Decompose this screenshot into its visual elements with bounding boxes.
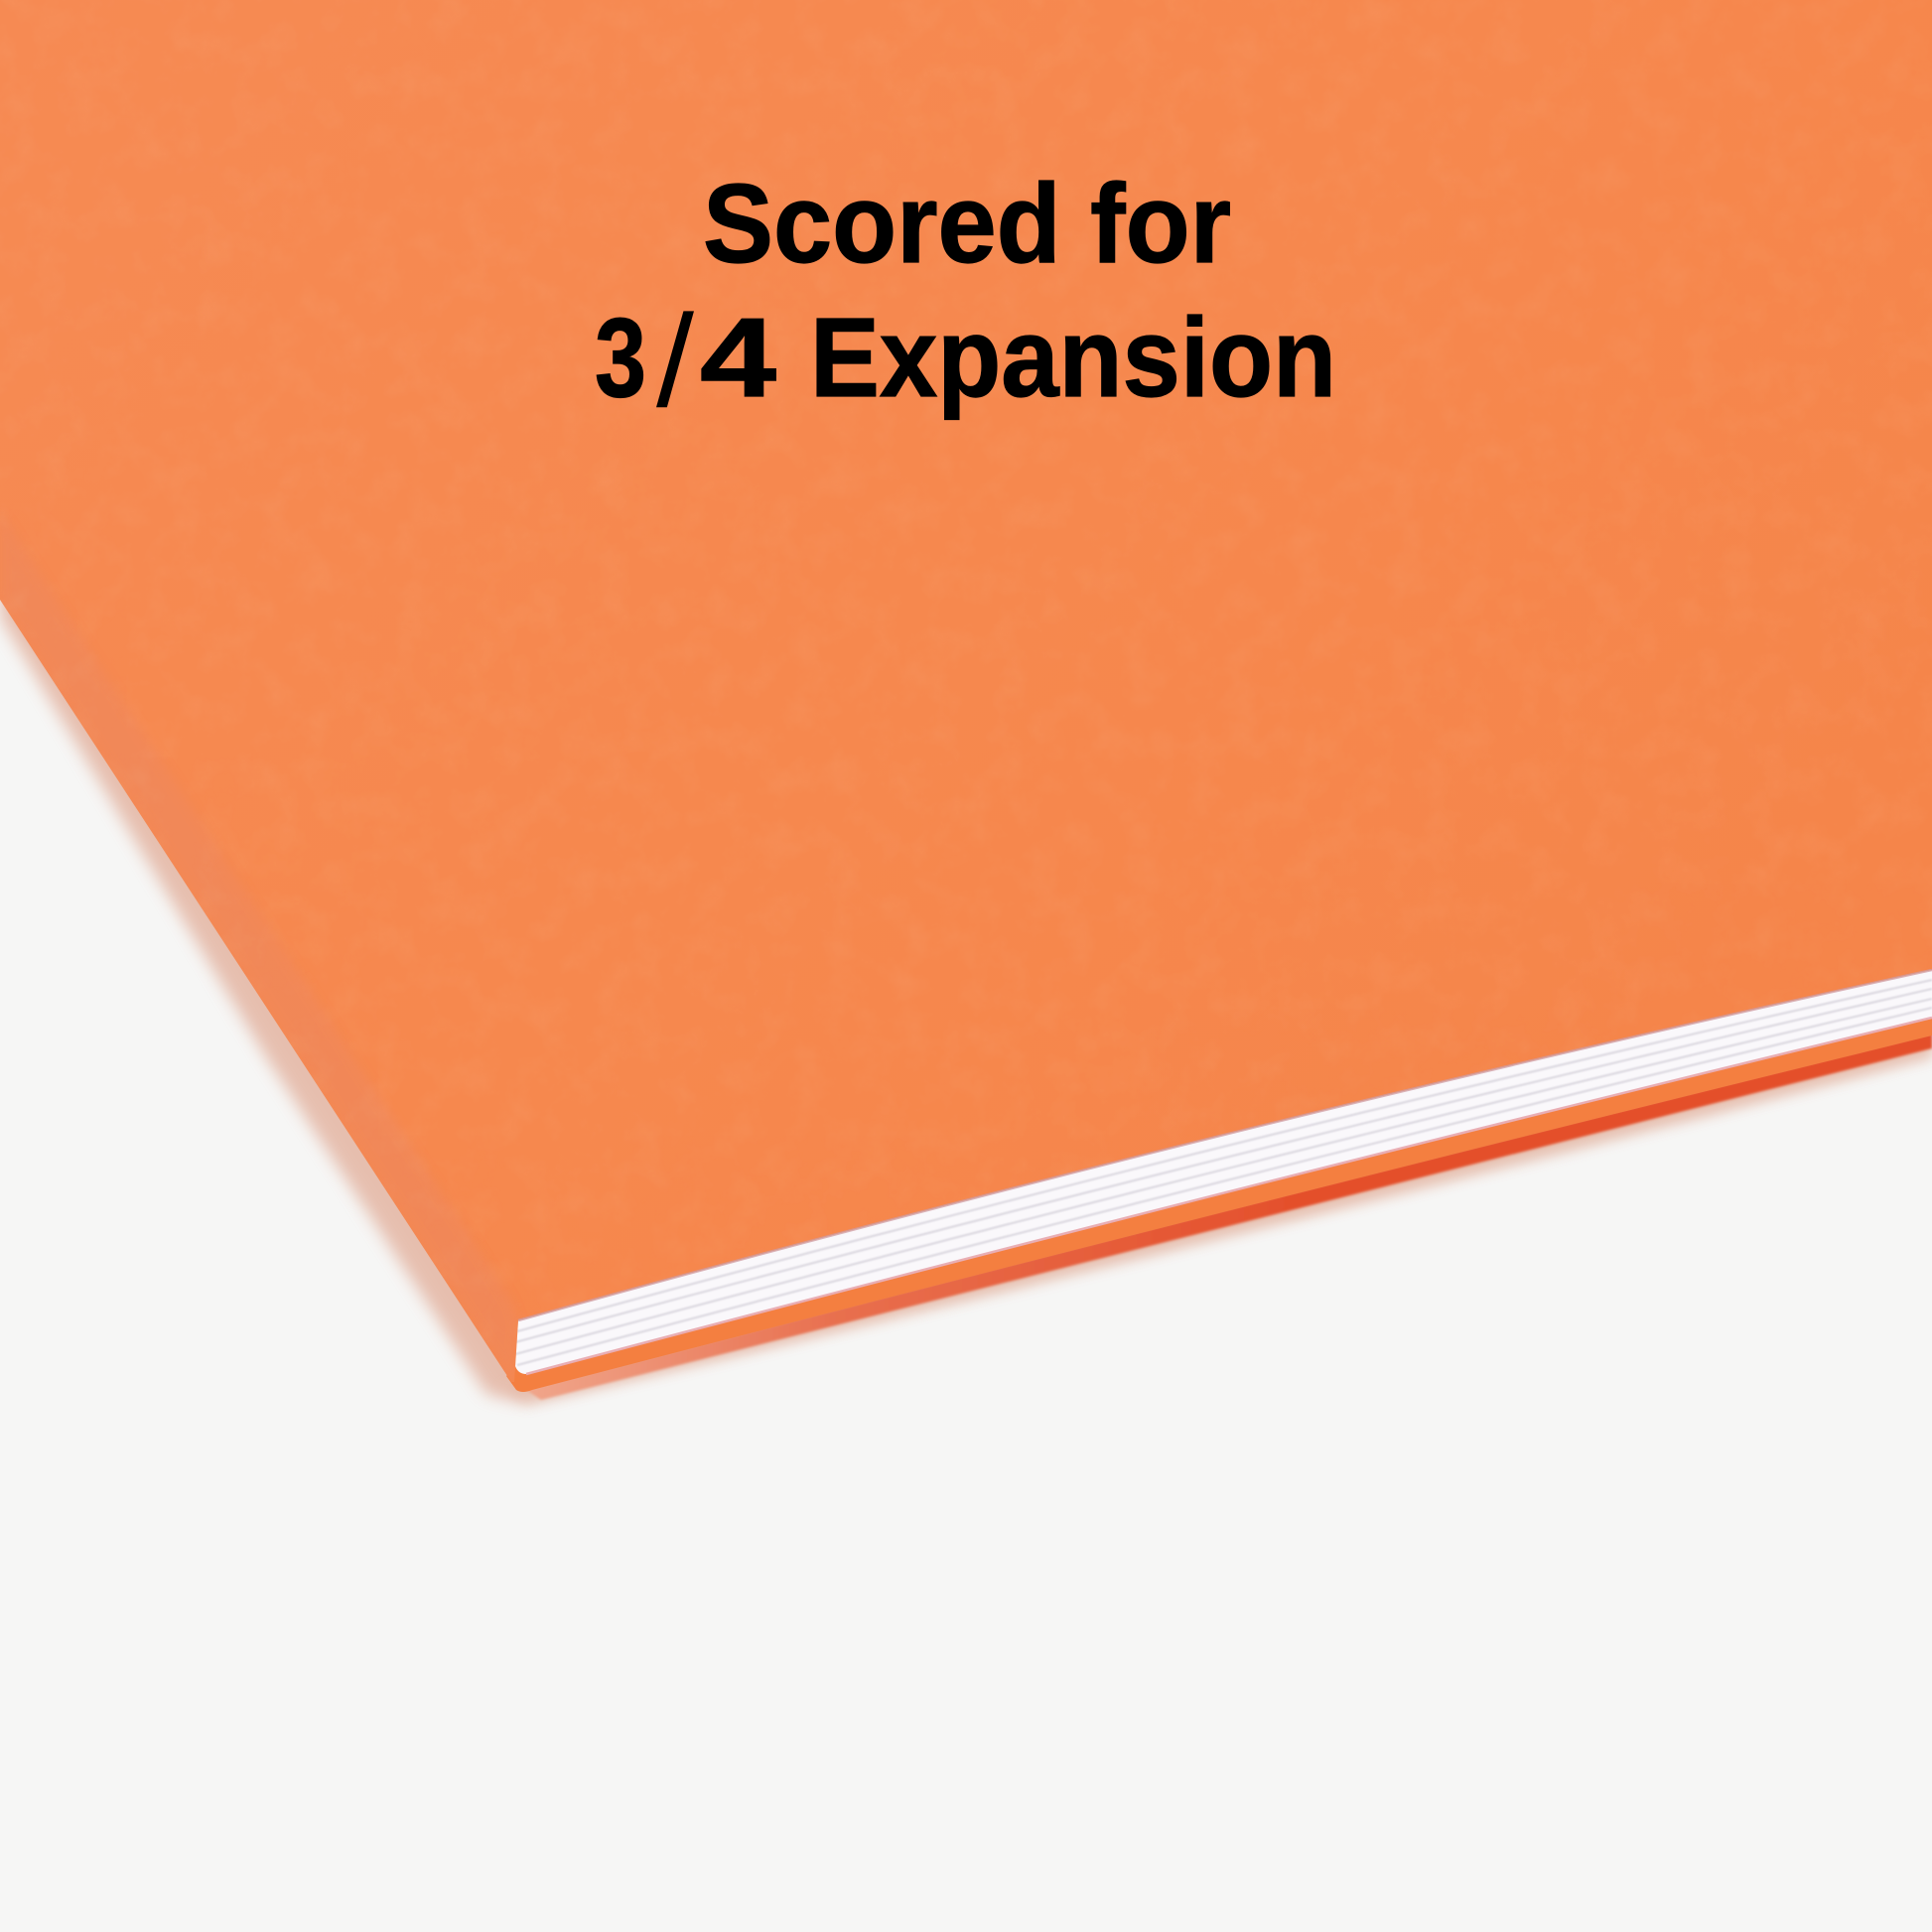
title line 2: Expansion bbox=[810, 295, 1336, 420]
spine strip bbox=[2, 602, 518, 1368]
back cover bbox=[506, 993, 1932, 1392]
title line 2: 4 bbox=[700, 295, 776, 420]
cover edge line bbox=[518, 970, 1932, 1320]
folder drop shadow bbox=[0, 586, 1932, 1406]
front cover bbox=[0, 0, 1932, 1382]
title line 2 bbox=[595, 288, 1336, 434]
title line 1: Scored for bbox=[703, 161, 1231, 286]
paper texture bbox=[0, 0, 1932, 1390]
title line 2: / bbox=[656, 288, 694, 434]
title line 2: 3 bbox=[595, 295, 646, 420]
back cover shadow edge bbox=[526, 1034, 1932, 1400]
title bbox=[595, 161, 1336, 434]
folder bbox=[0, 0, 1932, 1400]
paper sheets bbox=[514, 970, 1932, 1374]
